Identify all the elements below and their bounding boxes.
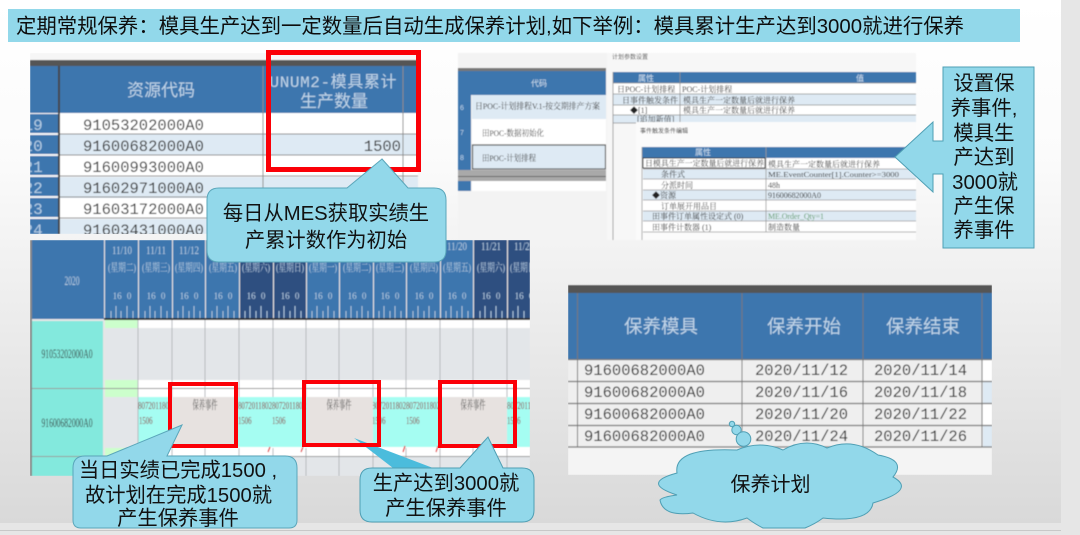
date labels: (星期四) [175,260,203,274]
date labels: 11/13 [213,243,233,257]
date labels: 16 0 [381,291,400,301]
date labels: (星期六) [477,260,505,274]
date labels: (星期二) [108,260,136,274]
event trigger editor: 模具生产一定数量后就进行保养 [768,159,880,169]
maintenance event bars: 保养事件 [192,397,218,412]
column headers [127,73,396,111]
event trigger editor: 田事件计数器 (1) [652,222,712,232]
date labels: 11/14 [246,243,266,257]
callout: 3000 triggers event: 生产达到3000就 [373,472,519,495]
date labels: (星期五) [209,260,237,274]
title banner: 定期常规保养：模具生产达到一定数量后自动生成保养计划,如下举例：模具累计生产达到3000就进行保养 [16,15,964,38]
event trigger editor: 制造数量 [768,222,800,232]
date labels: (星期四) [410,260,438,274]
callout: set maintenance event: 模具生 [953,122,1015,145]
date labels: 16 0 [214,291,233,301]
resource code rows: 91603431000A0 [83,222,204,240]
callout: daily MES data: 产累计数作为初始 [245,229,407,252]
date labels: 16 0 [147,291,166,301]
table headers: 保养开始 [767,316,841,337]
table rows: 2020/11/26 [874,428,967,446]
production bar labels: 1506 [139,415,153,427]
date labels: 11/22 [514,239,534,253]
resource code rows: 91053202000A0 [83,117,204,135]
callout: 1500 completed: 当日实绩已完成1500 , [79,459,277,482]
date labels: 11/18 [380,243,400,257]
date labels: 11/11 [146,243,166,257]
production bar labels: 8072011 [507,400,531,412]
callout: 1500 completed: 故计划在完成1500就 [85,484,272,507]
date labels: 16 0 [180,291,199,301]
table rows: 2020/11/16 [755,384,848,402]
tree table: 6 [460,105,464,112]
callout: daily MES data [207,159,446,262]
table rows: 2020/11/14 [874,362,967,380]
callout: 3000 triggers event [360,437,534,522]
event trigger editor: 48h [768,181,780,190]
callout: 3000 triggers event: 产生保养事件 [385,497,507,520]
event trigger editor: ME.EventCounter[1].Counter>=3000 [768,170,899,179]
settings dialog [607,53,916,240]
highlight: cumulative quantity column [268,52,418,170]
panel: resource table [24,53,420,240]
settings dialog: [追加新值] [637,114,675,124]
production bar labels: 1506 [507,415,521,427]
table rows: 2020/11/24 [755,428,848,446]
date labels: 16 0 [415,291,434,301]
tree table: 田POC-数据初始化 [482,128,544,138]
row numbers: 19 [24,117,43,135]
table rows: 91600682000A0 [584,362,705,380]
date labels: 11/19 [414,243,434,257]
production bar labels: 80720118028072011802 [372,400,440,412]
event trigger editor: ME.Order_Qty=1 [768,212,824,221]
table headers: 保养模具 [624,316,698,337]
table rows: 2020/11/12 [755,362,848,380]
table rows: 2020/11/20 [755,406,848,424]
date labels: 11/17 [347,243,367,257]
resource code rows: 91603172000A0 [83,201,204,219]
production bar labels: 1506 [406,415,420,427]
date labels: (星期二) [343,260,371,274]
callout pointer: first 3000 event [354,438,433,468]
schedule rows [32,320,530,476]
row numbers: 22 [24,180,43,198]
callout: set maintenance event [895,67,1034,248]
date header cells [104,240,530,320]
settings dialog: 日事件触发条件 [622,95,678,105]
column headers: UNUM2-模具累计 [270,73,396,92]
table rows: 91600682000A0 [584,384,705,402]
highlight: maintenance events [170,382,515,446]
table rows: 91600682000A0 [584,406,705,424]
date labels: (星期五) [443,260,471,274]
settings dialog: 属性 [638,73,654,83]
resource code rows: 91600682000A0 [83,138,204,156]
table headers [624,316,960,337]
callout: maintenance plan cloud: 保养计划 [730,473,810,496]
table rows: 91600682000A0 [584,428,705,446]
date labels: (星期六) [242,260,270,274]
event trigger editor: 属性 [695,147,711,157]
event trigger editor: 91600682000A0 [768,191,821,200]
resource code rows: 91602971000A0 [83,180,204,198]
settings dialog: 计划参数设置 [612,53,648,61]
tree table: 日POC-计划排程V.1-按交期排产方案 [475,101,600,111]
event trigger editor [636,122,916,240]
maintenance event bars: 保养事件 [460,397,486,412]
event trigger editor: 分派时间 [661,180,693,190]
production bar labels: 807201180 [138,400,169,412]
row labels: 2020 [64,273,80,288]
resource code rows: 91600993000A0 [83,159,204,177]
table rows: 2020/11/22 [874,406,967,424]
date labels [108,239,538,301]
event trigger editor: 田事件订单属性设定式 (0) [652,211,744,221]
panel: gantt chart [30,239,538,476]
production bar labels: 80720118028072011802 [238,400,306,412]
event trigger editor: 订单展开用品目 [661,201,717,211]
callout: set maintenance event: 产生保 [953,195,1015,218]
panel: plan parameter settings screenshot [458,53,916,240]
date labels: 16 0 [247,291,266,301]
production bar labels: 1506 [238,415,252,427]
date labels: 11/16 [313,243,333,257]
settings dialog: 日POC-计划排程 [617,84,675,94]
date labels: 11/21 [481,239,501,253]
panel: maintenance plan table [568,284,992,475]
column headers: 资源代码 [127,81,195,100]
callout: daily MES data: 每日从MES获取实绩生 [223,202,429,225]
title banner [8,9,1020,42]
date labels: 16 0 [448,291,467,301]
date labels: 16 0 [482,291,501,301]
date labels: 16 0 [314,291,333,301]
resource code rows [83,117,401,240]
settings dialog: 值 [856,73,864,83]
resource code rows: 1500 [364,138,401,156]
table rows [584,362,967,446]
row numbers [30,118,43,234]
event trigger editor: 事件触发条件编辑 [640,127,688,135]
row numbers: 20 [24,138,43,156]
callout: set maintenance event: 设置保 [953,72,1015,95]
date labels: (星期日) [510,260,538,274]
callout: set maintenance event: 3000就 [952,171,1018,194]
settings dialog: POC-计划排程 [682,84,732,94]
row numbers: 23 [24,201,43,219]
settings dialog: ◆[1] [630,106,648,115]
callout: maintenance plan cloud [658,421,901,528]
settings dialog: 模具生产一定数量后就进行保养 [683,105,795,115]
event trigger editor: ◆资源 [652,190,677,200]
tree table: 田POC-计划排程 [482,153,536,163]
date labels: 11/20 [447,239,467,253]
date labels: 11/15 [280,243,300,257]
callout: set maintenance event: 养事件 [953,219,1015,242]
date labels: 11/12 [179,243,199,257]
date labels: 16 0 [348,291,367,301]
date labels: 11/10 [112,243,132,257]
callout: set maintenance event: 养事件, [951,97,1017,120]
maintenance event bars [172,397,507,444]
date labels: (星期三) [376,260,404,274]
settings dialog: 模具生产一定数量后就进行保养 [683,95,795,105]
production bar labels [138,401,530,424]
date labels: (星期一) [309,260,337,274]
row numbers: 24 [24,222,43,240]
tree table [458,68,606,191]
tree table: 7 [460,130,464,137]
event trigger editor: 日模具生产一定数量后就进行保养 [645,158,764,168]
column headers: 生产数量 [300,92,368,111]
callout: set maintenance event: 产达到 [953,146,1015,169]
table headers: 保养结束 [886,316,960,337]
date labels: (星期三) [142,260,170,274]
date labels: 16 0 [515,291,534,301]
date labels: 16 0 [113,291,132,301]
date labels: (星期日) [276,260,304,274]
tree table: 代码 [531,78,547,88]
date labels: 16 0 [281,291,300,301]
production bar labels: 1506 [372,415,386,427]
tree table: 8 [460,155,464,162]
maintenance event bars: 保养事件 [326,397,352,412]
event trigger editor: 条件式 [661,169,685,179]
table rows: 2020/11/18 [874,384,967,402]
panel: gantt chart: 91053202000A0 [42,346,92,361]
callout: 1500 completed [73,425,297,530]
callout: 1500 completed: 产生保养事件 [117,507,239,530]
panel: gantt chart: 91600682000A0 [42,415,92,430]
row numbers: 21 [24,159,43,177]
production bar labels: 1506 [272,415,286,427]
